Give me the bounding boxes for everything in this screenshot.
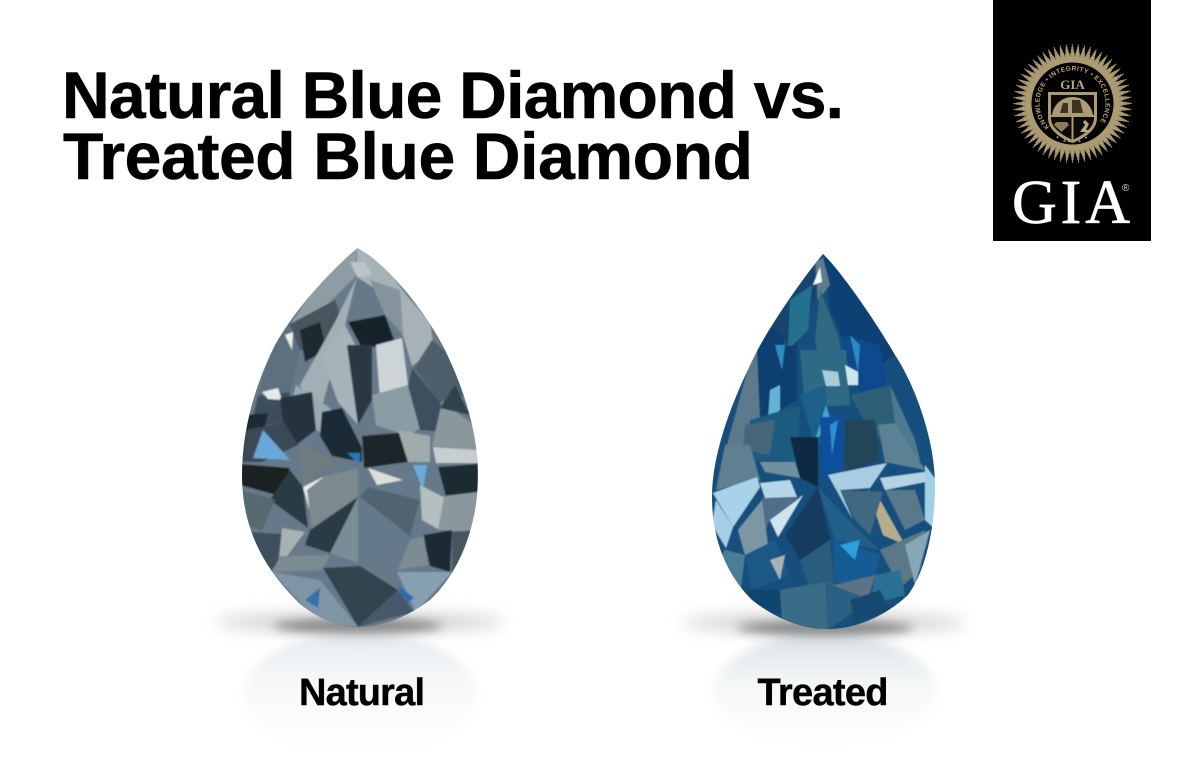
title: Natural Blue Diamond vs. <box>62 58 844 132</box>
icon: GIA seal <box>1013 44 1132 163</box>
natural diamond <box>236 244 484 634</box>
seal ring text: KNOWLEDGE • INTEGRITY • EXCELLENCE <box>1035 66 1110 130</box>
title: Treated Blue Diamond <box>63 119 753 193</box>
treated diamond shadow and reflection <box>683 614 967 750</box>
registered mark: ® <box>1122 183 1130 194</box>
GIA wordmark: GIA <box>1012 169 1130 237</box>
seal date: • 1931 • <box>1056 136 1087 142</box>
GIA logo panel <box>993 0 1151 241</box>
shield <box>1048 92 1097 143</box>
label: Treated: Treated <box>758 672 888 714</box>
title <box>62 58 844 193</box>
treated diamond <box>706 250 942 635</box>
seal GIA lettering: GIA <box>1060 77 1085 92</box>
label: Natural: Natural <box>299 672 425 714</box>
natural diamond shadow and reflection <box>215 613 505 757</box>
